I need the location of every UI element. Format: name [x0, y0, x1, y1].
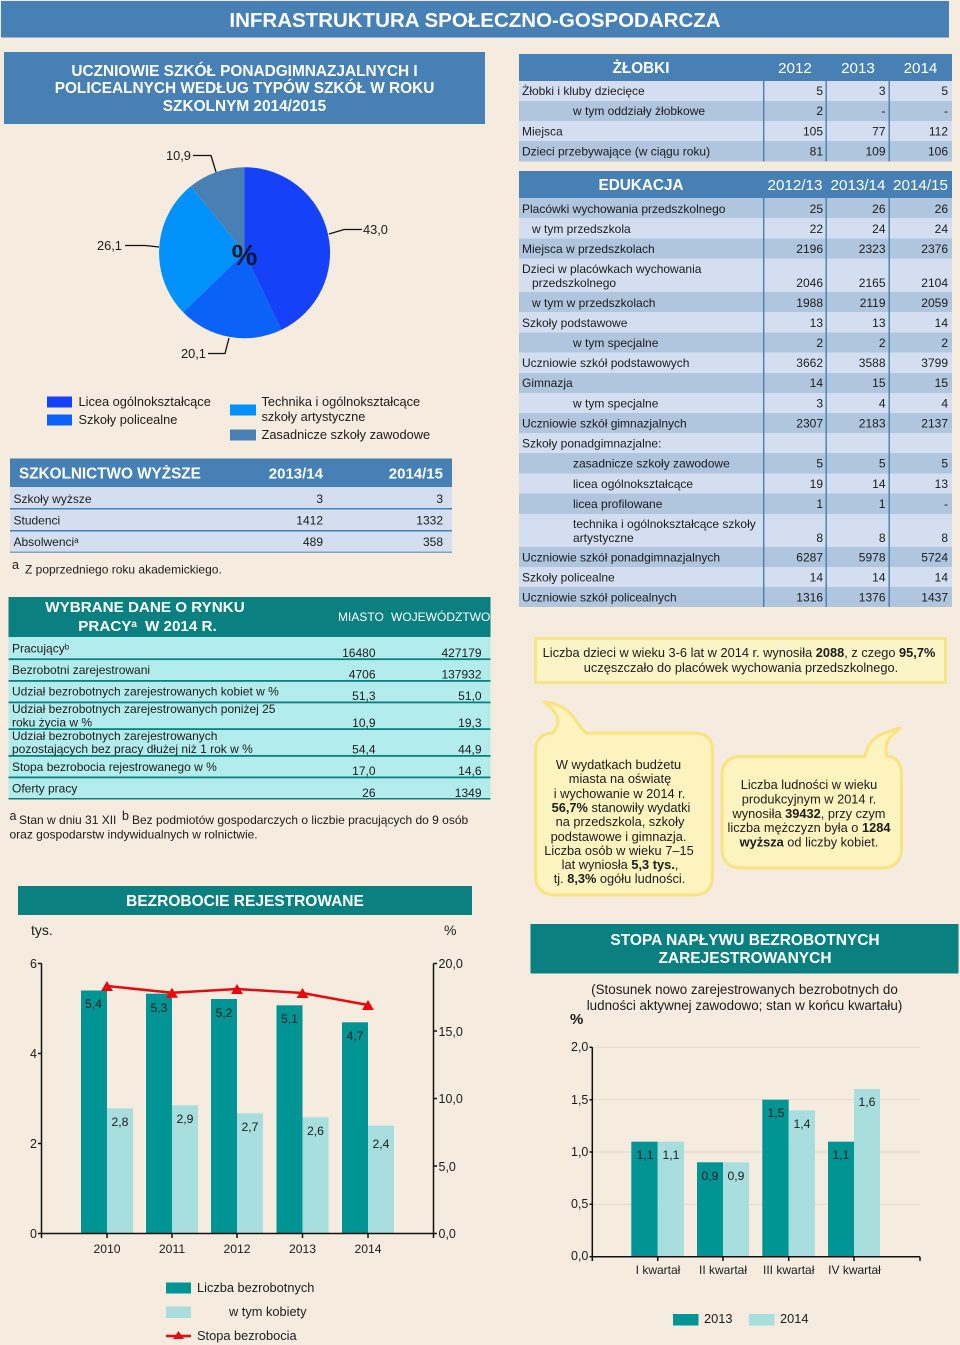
table: labour market: 427179 [441, 646, 482, 660]
combo chart: unemployed and rate: 2,7 [242, 1120, 259, 1134]
table: nurseries: 81 [810, 144, 823, 158]
heading: students by school type: SZKOLNYM 2014/2015 [163, 98, 327, 115]
table: education: 3 [816, 396, 823, 410]
table: labour market: 137932 [441, 668, 482, 682]
callout: working-age population: wynosiła 39432, przy czym [732, 806, 885, 821]
pie chart [97, 148, 388, 361]
bar chart: inflow rate by quarter: II kwartał [699, 1263, 747, 1277]
table: nurseries: ŻŁOBKI [613, 60, 669, 77]
table: nurseries: 77 [872, 124, 886, 138]
table: education: 1376 [859, 590, 886, 604]
callout: education spending: na przedszkola, szkoły [556, 814, 685, 829]
callout: education spending: W wydatkach budżetu [556, 757, 681, 772]
table: education: 3588 [859, 356, 886, 370]
table: education: 1 [879, 497, 886, 511]
combo chart: unemployed and rate: tys. [31, 922, 53, 938]
pie chart: 43,0 [363, 222, 388, 237]
table: education: 13 [810, 316, 823, 330]
callout: working-age population: wyższa od liczby kobiet. [739, 834, 878, 850]
callout: working-age population: liczba mężczyzn była o 1284 [728, 820, 891, 835]
table: nurseries: 5 [941, 84, 948, 98]
combo chart: unemployed and rate: 2014 [354, 1242, 382, 1256]
table: labour market [8, 597, 490, 800]
title banner [1, 1, 949, 38]
footnote: higher education: a [12, 558, 19, 572]
table: nurseries: 3 [879, 84, 886, 98]
table: education: Uczniowie szkół podstawowych [522, 356, 689, 370]
table: education: 2 [816, 336, 823, 350]
chart legend: inflow rate: 2014 [780, 1311, 808, 1326]
table: education: 14 [872, 477, 886, 491]
table: education: 14 [935, 316, 948, 330]
table: education: 25 [810, 202, 823, 216]
table: nurseries: 105 [803, 124, 823, 138]
table: higher education: 489 [303, 535, 323, 549]
table: education: 4 [941, 396, 948, 410]
table: education: Dzieci w placówkach wychowania [522, 262, 702, 276]
heading: registered unemployment: BEZROBOCIE REJESTROWANE [126, 893, 364, 910]
bar chart: inflow rate by quarter: 1,1 [663, 1148, 680, 1162]
table: labour market: 26 [362, 786, 376, 800]
chart legend: unemployment: Stopa bezrobocia [197, 1328, 297, 1343]
table: higher education: a [74, 536, 79, 545]
combo chart: unemployed and rate: 10,0 [438, 1092, 463, 1106]
callout: children aged 3-6 [536, 638, 946, 682]
footnote: labour market: a [10, 809, 16, 823]
callout: working-age population: produkcyjnym w 2014 r. [742, 792, 876, 806]
table: labour market: WOJEWÓDZTWO [391, 609, 490, 624]
table: education: 2376 [921, 242, 948, 256]
table: education: 2 [879, 336, 886, 350]
table: nurseries: 2012 [778, 60, 812, 77]
table: labour market: 14,6 [458, 764, 482, 778]
table: labour market: Udział bezrobotnych zarejestrowanych [12, 729, 217, 743]
combo chart: unemployed and rate: 2,8 [112, 1115, 129, 1129]
table: nurseries: 112 [929, 124, 948, 138]
table: nurseries: 5 [816, 84, 823, 98]
table: education: artystyczne [573, 531, 634, 545]
combo chart: unemployed and rate: 2011 [159, 1242, 185, 1256]
table: labour market: 16480 [342, 646, 376, 660]
table: education: 2059 [921, 296, 948, 310]
table: labour market: 19,3 [458, 716, 482, 730]
table: education: 3799 [921, 356, 948, 370]
callout: education spending: Liczba osób w wieku 7–15 [544, 843, 694, 858]
table: education: Miejsca w przedszkolach [522, 242, 655, 256]
table: labour market: a [131, 619, 137, 630]
table: labour market: Bezrobotni zarejestrowani [12, 663, 150, 677]
table: education: 19 [810, 477, 823, 491]
bar chart: inflow rate by quarter: 1,5 [768, 1106, 785, 1120]
table: higher education: 1412 [296, 514, 323, 528]
table: education: 2012/13 [768, 177, 822, 194]
callout: education spending: 56,7% stanowiły wydatki [552, 800, 690, 815]
table: education: 24 [872, 222, 886, 236]
table: education: 26 [935, 202, 948, 216]
table: labour market: Pracujący [12, 642, 65, 656]
table: nurseries: Żłobki i kluby dziecięce [522, 84, 645, 98]
combo chart: unemployed and rate: 5,1 [281, 1012, 298, 1026]
table: higher education: Absolwenci [14, 535, 74, 549]
table: higher education: 3 [436, 492, 443, 506]
table: education: technika i ogólnokształcące szkoły [573, 517, 756, 531]
table: education: 2046 [796, 276, 823, 290]
table: labour market: 54,4 [352, 742, 376, 756]
combo chart: unemployed and rate: 4 [30, 1047, 37, 1061]
bar chart: inflow rate by quarter: 2,0 [571, 1040, 588, 1054]
combo chart: unemployed and rate: 0,0 [438, 1227, 456, 1241]
table: labour market: pozostających bez pracy dłużej niż 1 rok w % [12, 742, 253, 756]
table: education: w tym w przedszkolach [531, 296, 655, 310]
panel: registered unemployment [18, 886, 472, 1343]
combo chart: unemployed and rate: 5,0 [438, 1160, 456, 1174]
table: education: 1437 [921, 590, 948, 604]
table: higher education: SZKOLNICTWO WYŻSZE [19, 466, 201, 482]
combo chart: unemployed and rate: 5,2 [216, 1006, 233, 1020]
table: nurseries: Miejsca [522, 124, 563, 138]
callout: education spending: podstawowe i gimnazja. [551, 829, 686, 844]
table: education: 26 [872, 202, 886, 216]
callout: children aged 3-6: uczęszczało do placówek wychowania przedszkolnego. [584, 660, 898, 675]
table: education: 2013/14 [831, 177, 885, 194]
table: education: 14 [810, 570, 823, 584]
table: labour market: WYBRANE DANE O RYNKU [45, 599, 245, 616]
table: higher education: 3 [316, 492, 323, 506]
table: education: 15 [935, 376, 948, 390]
table: education: w tym specjalne [572, 336, 659, 350]
table: higher education: Szkoły wyższe [14, 492, 92, 506]
table: labour market: b [65, 642, 70, 652]
table: education: w tym specjalne [572, 396, 659, 410]
table: labour market: 4706 [349, 668, 376, 682]
bar chart: inflow rate by quarter: 0,9 [702, 1169, 719, 1183]
callout: working-age population [722, 728, 902, 868]
bar chart: inflow rate by quarter: 1,0 [571, 1145, 588, 1159]
chart legend: inflow rate [673, 1311, 808, 1326]
heading: students by school type: UCZNIOWIE SZKÓŁ PONADGIMNAZJALNYCH I [71, 62, 418, 80]
combo chart: unemployed and rate: 2012 [223, 1242, 251, 1256]
callout: working-age population: Liczba ludności w wieku [741, 777, 877, 792]
table: education: Placówki wychowania przedszkolnego [522, 202, 726, 216]
pie legend: Licea ogólnokształcące [78, 394, 211, 409]
combo chart: unemployed and rate: 2013 [289, 1242, 316, 1256]
combo chart: unemployed and rate: 2010 [93, 1242, 121, 1256]
callout: education spending: i wychowanie w 2014 r. [554, 786, 685, 801]
table: education: 2307 [796, 416, 823, 430]
table: education: 14 [872, 570, 886, 584]
table: education [519, 171, 952, 607]
table: education: 14 [810, 376, 823, 390]
chart legend: unemployment: Liczba bezrobotnych [197, 1280, 314, 1295]
table: education: przedszkolnego [532, 276, 616, 290]
table: nurseries: 109 [865, 144, 886, 158]
table: higher education: 1332 [416, 514, 443, 528]
table: education: 13 [935, 477, 948, 491]
combo chart: unemployed and rate: 2,9 [177, 1112, 194, 1126]
bar chart: inflow rate by quarter [570, 1011, 920, 1277]
table: labour market: roku życia w % [12, 716, 92, 730]
table: education: - [944, 497, 948, 511]
table: nurseries: 2 [816, 104, 823, 118]
pie chart: 20,1 [181, 346, 206, 361]
table: education: Uczniowie szkół ponadgimnazjalnych [522, 550, 720, 564]
table: education: Szkoły policealne [522, 570, 615, 584]
footnote: labour market: oraz gospodarstw indywidualnych w rolnictwie. [10, 828, 258, 842]
table: labour market: Stopa bezrobocia rejestrowanego w % [12, 760, 217, 774]
table: labour market: 17,0 [352, 764, 376, 778]
table: education: Uczniowie szkół policealnych [522, 590, 677, 604]
pie legend [47, 394, 430, 442]
heading: inflow rate: ZAREJESTROWANYCH [658, 950, 832, 967]
table: education: 5978 [859, 550, 886, 564]
table: nurseries: w tym oddziały żłobkowe [572, 104, 705, 118]
callout: education spending: lat wyniosła 5,3 tys., [562, 857, 678, 872]
table: education: 15 [872, 376, 886, 390]
pie legend: Zasadnicze szkoły zawodowe [262, 427, 430, 442]
combo chart: unemployed and rate: 15,0 [438, 1025, 463, 1039]
table: education: 14 [935, 570, 948, 584]
table: education: Szkoły podstawowe [522, 316, 628, 330]
callout: education spending [536, 702, 712, 895]
table: labour market: PRACY [78, 618, 131, 635]
footnote: labour market [10, 809, 469, 842]
footnote: higher education: Z poprzedniego roku akademickiego. [25, 562, 222, 576]
table: education: licea ogólnokształcące [573, 477, 693, 491]
table: education: 2183 [859, 416, 886, 430]
table: labour market: Oferty pracy [12, 782, 77, 796]
table: nurseries: - [944, 104, 948, 118]
chart subtitle [587, 982, 902, 1013]
chart legend: inflow rate: 2013 [704, 1311, 732, 1326]
table: education: 5 [941, 456, 948, 470]
heading: inflow rate: STOPA NAPŁYWU BEZROBOTNYCH [610, 932, 880, 949]
table: education: 4 [879, 396, 886, 410]
combo chart: unemployed and rate: % [444, 922, 456, 938]
table: labour market: MIASTO [338, 610, 384, 624]
chart legend: unemployment: w tym kobiety [228, 1304, 307, 1319]
footnote: labour market: Bez podmiotów gospodarczych o liczbie pracujących do 9 osób [132, 813, 469, 827]
panel: inflow rate of registered unemployed [530, 924, 958, 1326]
table: higher education: 358 [423, 535, 443, 549]
table: education: 2014/15 [893, 177, 948, 194]
table: higher education: Studenci [14, 514, 60, 528]
bar chart: inflow rate by quarter: III kwartał [763, 1263, 815, 1277]
callout: education spending: tj. 8,3% ogółu ludności. [554, 871, 685, 886]
pie chart: 10,9 [166, 148, 191, 163]
table: education: 8 [816, 531, 823, 545]
table: education: 8 [941, 531, 948, 545]
table: education: 22 [810, 222, 823, 236]
combo chart: unemployed and rate: 2 [30, 1137, 37, 1151]
bar chart: inflow rate by quarter: 1,4 [794, 1117, 811, 1131]
pie chart: 26,1 [97, 238, 122, 253]
bar chart: inflow rate by quarter: 1,5 [571, 1093, 588, 1107]
table: education: 2137 [921, 416, 948, 430]
table: education: 5 [879, 456, 886, 470]
callout: education spending: miasta na oświatę [569, 771, 671, 786]
combo chart: unemployed and rate [30, 922, 463, 1256]
chart legend: unemployment [166, 1280, 314, 1343]
table: education: 2119 [860, 296, 886, 310]
combo chart: unemployed and rate: 2,4 [373, 1137, 390, 1151]
table: higher education: 2013/14 [269, 466, 324, 482]
table: nurseries: 2014 [904, 60, 937, 77]
table: nurseries: - [882, 104, 886, 118]
combo chart: unemployed and rate: 20,0 [438, 957, 463, 971]
table: labour market: W 2014 R. [145, 618, 217, 635]
combo chart: unemployed and rate: 2,6 [307, 1124, 324, 1138]
bar chart: inflow rate by quarter: I kwartał [636, 1263, 681, 1277]
combo chart: unemployed and rate: 5,3 [151, 1001, 168, 1015]
pie legend: Szkoły policealne [78, 412, 177, 427]
bar chart: inflow rate by quarter: 1,1 [637, 1148, 654, 1162]
bar chart: inflow rate by quarter: % [570, 1011, 583, 1028]
table: education: licea profilowane [573, 497, 663, 511]
heading: inflow rate [530, 924, 958, 974]
table: nurseries: 106 [928, 144, 948, 158]
table: education: EDUKACJA [598, 177, 684, 194]
combo chart: unemployed and rate: 6 [30, 957, 37, 971]
table: education: 2165 [859, 276, 886, 290]
table: education: Uczniowie szkół gimnazjalnych [522, 416, 687, 430]
footnote: labour market: b [122, 809, 129, 823]
table: labour market: 1349 [455, 786, 482, 800]
heading: students by school type: POLICEALNYCH WEDŁUG TYPÓW SZKÓŁ W ROKU [55, 79, 434, 97]
table: education: 1988 [796, 296, 823, 310]
table: education: 2104 [921, 276, 948, 290]
table: education: w tym przedszkola [531, 222, 631, 236]
table: education: zasadnicze szkoły zawodowe [573, 456, 730, 470]
combo chart: unemployed and rate: 0 [30, 1227, 37, 1241]
table: education: 2323 [859, 242, 886, 256]
table: labour market: 51,0 [458, 689, 482, 703]
table: nurseries [519, 54, 952, 162]
pie legend: Technika i ogólnokształcące [262, 394, 420, 409]
table: higher education [10, 458, 452, 553]
bar chart: inflow rate by quarter: 0,0 [571, 1249, 588, 1263]
table: nurseries: 2013 [841, 60, 875, 77]
chart subtitle: (Stosunek nowo zarejestrowanych bezrobotnych do [591, 982, 898, 997]
pie legend: szkoły artystyczne [262, 409, 365, 424]
heading: registered unemployment [18, 886, 472, 915]
table: nurseries: Dzieci przebywające (w ciągu roku) [522, 144, 710, 158]
table: education: 6287 [796, 550, 823, 564]
table: education: 1 [816, 497, 823, 511]
table: education: 8 [879, 531, 886, 545]
table: education: Gimnazja [522, 376, 573, 390]
callout: children aged 3-6: Liczba dzieci w wieku 3-6 lat w 2014 r. wynosiła 2088, z czego 95,7% [543, 645, 936, 660]
table: education: Szkoły ponadgimnazjalne: [522, 436, 661, 450]
bar chart: inflow rate by quarter: 0,9 [728, 1169, 745, 1183]
bar chart: inflow rate by quarter: 0,5 [571, 1197, 588, 1211]
combo chart: unemployed and rate: 5,4 [85, 997, 102, 1011]
bar chart: inflow rate by quarter: IV kwartał [828, 1263, 881, 1277]
bar chart: inflow rate by quarter: 1,6 [859, 1095, 876, 1109]
table: labour market: 51,3 [352, 689, 376, 703]
pie chart: % [232, 240, 258, 272]
table: labour market: 44,9 [458, 742, 482, 756]
chart subtitle: ludności aktywnej zawodowo; stan w końcu kwartału) [587, 998, 902, 1013]
footnote: labour market: Stan w dniu 31 XII [19, 813, 116, 827]
table: education: 2 [941, 336, 948, 350]
table: labour market: 10,9 [352, 716, 376, 730]
bar chart: inflow rate by quarter: 1,1 [833, 1148, 850, 1162]
table: education: 2196 [796, 242, 823, 256]
table: education: 24 [935, 222, 948, 236]
panel: students by school type [4, 52, 485, 442]
combo chart: unemployed and rate: 4,7 [347, 1029, 364, 1043]
table: education: 5724 [921, 550, 948, 564]
heading: students by school type [4, 52, 485, 124]
table: education: 3662 [796, 356, 823, 370]
table: education: 13 [872, 316, 886, 330]
table: education: 1316 [796, 590, 823, 604]
table: labour market: Udział bezrobotnych zarejestrowanych kobiet w % [12, 684, 279, 698]
table: education: 5 [816, 456, 823, 470]
table: higher education: 2014/15 [389, 466, 443, 482]
title banner: INFRASTRUKTURA SPOŁECZNO-GOSPODARCZA [229, 9, 721, 32]
table: labour market: Udział bezrobotnych zarejestrowanych poniżej 25 [12, 702, 276, 716]
